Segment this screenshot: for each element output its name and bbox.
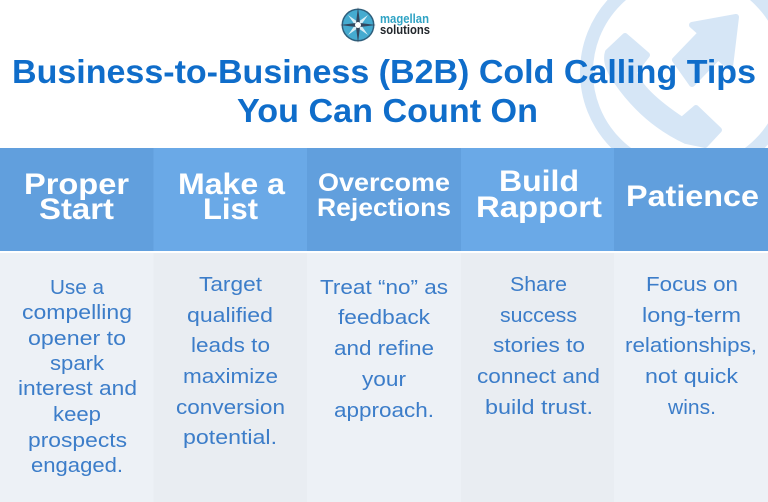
text: Make a List body: qualified [187, 305, 273, 327]
title: Business-to-Business (B2B) Cold Calling Tips [12, 53, 756, 90]
text: Patience body: not quick [645, 366, 739, 388]
text: Proper Start body: engaged. [31, 455, 123, 477]
heading: Overcome Rejections: Overcome [318, 169, 450, 197]
text: Proper Start body: prospects [28, 430, 127, 452]
text: Build Rapport body: build trust. [485, 397, 593, 419]
text: Proper Start body: spark [50, 353, 105, 375]
text: Build Rapport body: Share [510, 274, 567, 296]
text: Make a List body: leads to [191, 335, 270, 357]
heading: Proper Start [24, 168, 129, 226]
text: Proper Start body: Use a [50, 277, 105, 299]
text: Make a List body: conversion [176, 397, 285, 419]
logo wordmark: magellan [380, 12, 429, 26]
text: Make a List body: Target [199, 274, 262, 296]
heading: Make a List: List [203, 193, 258, 226]
text: Proper Start body: opener to [28, 328, 126, 350]
text: Overcome Rejections body: feedback [338, 307, 431, 329]
heading: Patience: Patience [626, 180, 759, 213]
text: Build Rapport body: stories to [493, 335, 585, 357]
text: Build Rapport body: connect and [477, 366, 600, 388]
text: Overcome Rejections body [320, 277, 448, 422]
text: Make a List body [176, 274, 285, 449]
icon: compass [340, 7, 376, 43]
heading: Make a List: Make a [178, 168, 285, 201]
text: Build Rapport body [477, 274, 600, 419]
text: Proper Start body: keep [53, 404, 101, 426]
text: Make a List body: potential. [183, 427, 277, 449]
text: Build Rapport body: success [500, 305, 577, 327]
text: Patience body [625, 274, 757, 419]
text: Make a List body: maximize [183, 366, 278, 388]
logo wordmark: solutions [380, 23, 430, 37]
heading: Overcome Rejections: Rejections [317, 194, 451, 222]
text: Proper Start body: interest and [18, 378, 137, 400]
heading: Make a List [178, 168, 285, 226]
heading: Build Rapport [476, 165, 602, 224]
title: You Can Count On [237, 92, 538, 129]
heading: Proper Start: Start [39, 193, 114, 226]
heading: Build Rapport: Build [499, 165, 579, 198]
text: Proper Start body: compelling [22, 302, 132, 324]
panel: table backgrounds [0, 148, 768, 502]
text: Proper Start body [18, 277, 137, 477]
text: Overcome Rejections body: approach. [334, 400, 434, 422]
title [12, 53, 756, 129]
logo wordmark [380, 12, 430, 37]
text: Overcome Rejections body: and refine [334, 338, 434, 360]
text: Overcome Rejections body: your [362, 369, 406, 391]
heading: Proper Start: Proper [24, 168, 129, 201]
text: Patience body: wins. [667, 397, 716, 419]
icon: background phone watermark [586, 0, 768, 174]
heading: Build Rapport: Rapport [476, 191, 602, 224]
text: Patience body: long-term [642, 305, 741, 327]
text: Patience body: Focus on [646, 274, 738, 296]
heading: Overcome Rejections [317, 169, 451, 222]
text: Patience body: relationships, [625, 335, 757, 357]
logo [340, 7, 430, 43]
text: Overcome Rejections body: Treat “no” as [320, 277, 448, 299]
